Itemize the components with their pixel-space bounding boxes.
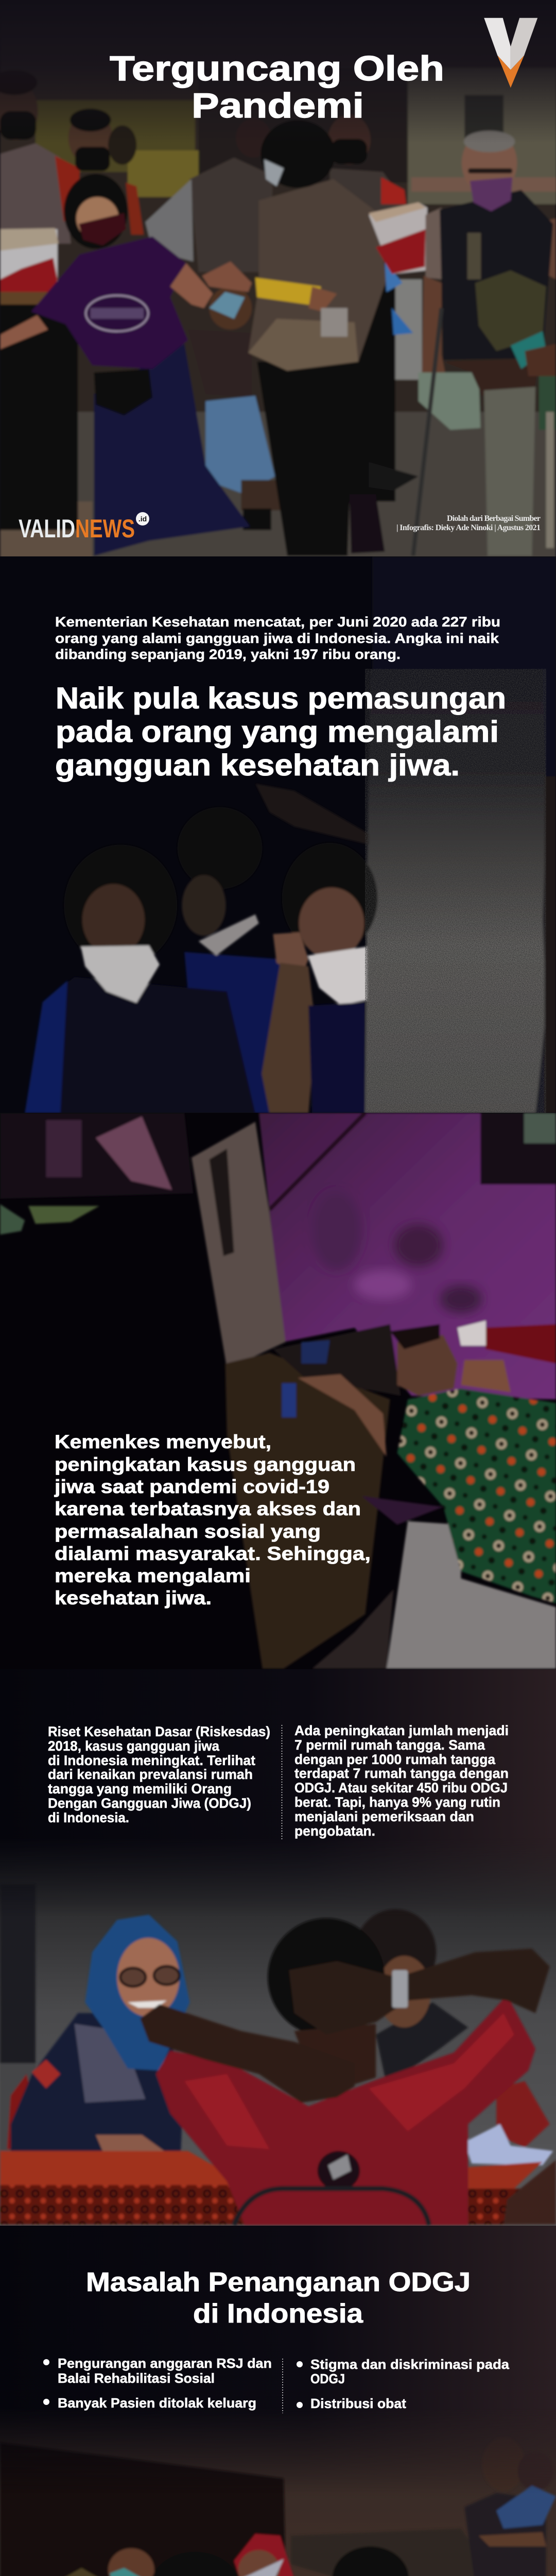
bullet list: right: Distribusi obat xyxy=(310,2396,406,2411)
text column: household prevalence: ODGJ. Atau sekitar 450 ribu ODGJ xyxy=(294,1780,508,1795)
explanation text xyxy=(54,1431,371,1608)
text column: riskesdas: Riset Kesehatan Dasar (Riskesdas) xyxy=(48,1724,270,1739)
text column: riskesdas: di Indonesia meningkat. Terlihat xyxy=(48,1753,255,1768)
explanation text: permasalahan sosial yang xyxy=(55,1521,321,1542)
bullet list: left: Banyak Pasien ditolak keluarg xyxy=(58,2395,256,2411)
bullet list: right: ODGJ xyxy=(310,2371,345,2386)
heading: ODGJ problems: di Indonesia xyxy=(193,2299,363,2329)
explanation text: Kemenkes menyebut, xyxy=(55,1431,271,1452)
explanation text: karena terbatasnya akses dan xyxy=(55,1498,361,1519)
panel: kemenkes statistics section xyxy=(24,556,556,1113)
bullet list: right: Stigma dan diskriminasi pada xyxy=(310,2357,510,2372)
text column: riskesdas: 2018, kasus gangguan jiwa xyxy=(48,1738,220,1754)
text column: household prevalence: terdapat 7 rumah tangga dengan xyxy=(294,1766,509,1781)
logo: Validnews: NEWS xyxy=(75,514,135,543)
heading: pasung cases rise: pada orang yang mengalami xyxy=(56,715,499,749)
title xyxy=(110,49,444,125)
text column: household prevalence: 7 permil rumah tangga. Sama xyxy=(294,1737,485,1753)
text column: household prevalence: Ada peningkatan jumlah menjadi xyxy=(294,1723,509,1738)
intro text: Kementerian Kesehatan mencatat, per Juni 2020 ada 227 ribu xyxy=(55,614,500,630)
logo: Validnews: VALID xyxy=(19,514,75,543)
intro text xyxy=(55,614,500,662)
text column: riskesdas: tangga yang memiliki Orang xyxy=(48,1781,232,1797)
source credit: Diolah dari Berbagai Sumber xyxy=(447,514,541,523)
intro text: dibanding sepanjang 2019, yakni 197 ribu orang. xyxy=(55,647,401,662)
text column: riskesdas xyxy=(48,1724,270,1825)
bullet list: right xyxy=(297,2357,510,2411)
text column: household prevalence: berat. Tapi, hanya 9% yang rutin xyxy=(294,1794,500,1810)
bullet list: left: Balai Rehabilitasi Sosial xyxy=(58,2370,215,2386)
source credit xyxy=(396,514,541,532)
bullet list: left xyxy=(43,2355,272,2411)
logo: Validnews: .id xyxy=(138,515,147,523)
explanation text: kesehatan jiwa. xyxy=(55,1587,212,1608)
photo: masked patients beside concrete wall xyxy=(25,556,556,1113)
bullet list: left: Pengurangan anggaran RSJ dan xyxy=(58,2355,272,2371)
text column: household prevalence: dengan per 1000 rumah tangga xyxy=(294,1752,496,1767)
heading: pasung cases rise: Naik pula kasus pemasungan xyxy=(56,682,506,715)
explanation text: mereka mengalami xyxy=(55,1565,251,1586)
photo: person lying in purple room xyxy=(0,1113,556,1669)
intro text: orang yang alami gangguan jiwa di Indonesia. Angka ini naik xyxy=(55,631,499,646)
text column: household prevalence: menjalani pemeriksaan dan xyxy=(294,1809,474,1824)
heading: pasung cases rise xyxy=(55,682,506,782)
text column: household prevalence xyxy=(294,1723,509,1839)
panel: kemenkes explanation section xyxy=(0,1113,556,1669)
title: Pandemi xyxy=(192,86,364,125)
title: Terguncang Oleh xyxy=(110,49,444,88)
photo: health workers checking patient xyxy=(0,2226,556,2576)
panel: riskesdas section xyxy=(0,1669,556,2226)
explanation text: peningkatan kasus gangguan xyxy=(55,1454,356,1475)
icon: V logo xyxy=(484,18,537,88)
panel: handling problems section xyxy=(0,2226,556,2576)
source credit: | Infografis: Dieky Ade Ninoki | Agustus 2021 xyxy=(396,523,541,532)
heading: ODGJ problems: Masalah Penanganan ODGJ xyxy=(86,2267,471,2297)
text column: riskesdas: Dengan Gangguan Jiwa (ODGJ) xyxy=(48,1795,251,1811)
text column: riskesdas: dari kenaikan prevalansi rumah xyxy=(48,1767,253,1782)
text column: household prevalence: pengobatan. xyxy=(294,1823,375,1839)
photo: police and people with disabilities xyxy=(0,0,556,559)
photo: patient in red covering face xyxy=(0,1669,556,2225)
logo: Validnews xyxy=(19,512,149,543)
explanation text: jiwa saat pandemi covid-19 xyxy=(54,1476,329,1497)
panel: hero photo section xyxy=(0,0,556,556)
text column: riskesdas: di Indonesia. xyxy=(48,1810,129,1825)
heading: pasung cases rise: gangguan kesehatan jiwa. xyxy=(55,749,460,782)
heading: ODGJ problems xyxy=(86,2267,471,2329)
explanation text: dialami masyarakat. Sehingga, xyxy=(55,1543,371,1564)
